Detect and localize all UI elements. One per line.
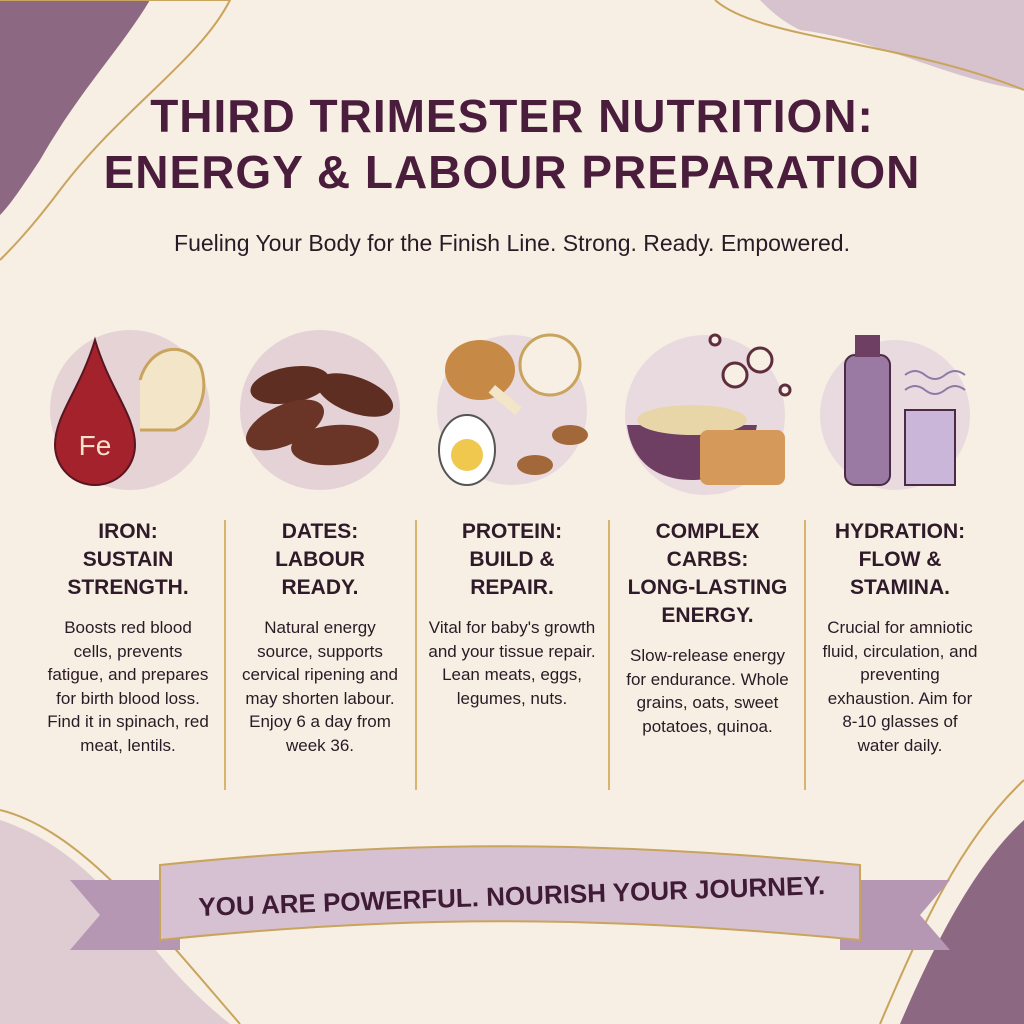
column: hydration: HYDRATION:: [835, 520, 965, 543]
column: carbs: Slow-release energy for endurance. Whole grains, oats, sweet potatoes, quinoa.: [626, 646, 789, 736]
icon: carbs: [625, 335, 790, 495]
column: iron: Boosts red blood cells, prevents fatigue, and prepares for birth blood loss. Find it in spinach, red meat, lentils.: [47, 618, 209, 754]
column: dates: LABOUR: [275, 548, 365, 571]
column: carbs: CARBS:: [667, 548, 748, 571]
subtitle: Fueling Your Body for the Finish Line. Strong. Ready. Empowered.: [174, 230, 850, 256]
icon: dates: [238, 330, 400, 490]
title: [104, 90, 920, 198]
column: protein: REPAIR.: [470, 576, 554, 599]
column: dates: Natural energy source, supports cervical ripening and may shorten labour. Enjoy 6 a day from week 36.: [242, 618, 398, 754]
column: hydration: [822, 520, 977, 754]
column: iron: SUSTAIN: [83, 548, 173, 571]
column: protein: Vital for baby's growth and your tissue repair. Lean meats, eggs, legumes, nuts.: [428, 618, 596, 708]
column: carbs: LONG-LASTING: [628, 576, 787, 599]
icon: iron drop: Fe: [79, 430, 111, 461]
column: dates: READY.: [281, 576, 359, 599]
column: hydration: FLOW &: [859, 548, 941, 571]
icon: hydration: [820, 335, 970, 490]
column: dates: [242, 520, 398, 754]
icons: [50, 330, 970, 495]
column: hydration: STAMINA.: [850, 576, 950, 599]
column: carbs: ENERGY.: [661, 604, 754, 627]
banner ribbon: [70, 845, 950, 950]
icon: protein: [437, 335, 588, 485]
column: carbs: COMPLEX: [656, 520, 759, 543]
column: dates: DATES:: [282, 520, 358, 543]
column: protein: PROTEIN:: [462, 520, 562, 543]
title: THIRD TRIMESTER NUTRITION:: [150, 90, 874, 142]
column: iron: STRENGTH.: [67, 576, 189, 599]
column: iron: [47, 520, 209, 754]
column: iron: IRON:: [98, 520, 158, 543]
icon: iron drop: [50, 330, 210, 490]
banner ribbon: YOU ARE POWERFUL. NOURISH YOUR JOURNEY.: [198, 870, 826, 922]
column: hydration: Crucial for amniotic fluid, circulation, and preventing exhaustion. Aim for 8-10 glasses of water daily.: [822, 618, 977, 754]
column: protein: BUILD &: [469, 548, 555, 571]
dividers: [224, 520, 226, 790]
column: carbs: [626, 520, 789, 736]
title: ENERGY & LABOUR PREPARATION: [104, 146, 920, 198]
column: protein: [428, 520, 596, 708]
